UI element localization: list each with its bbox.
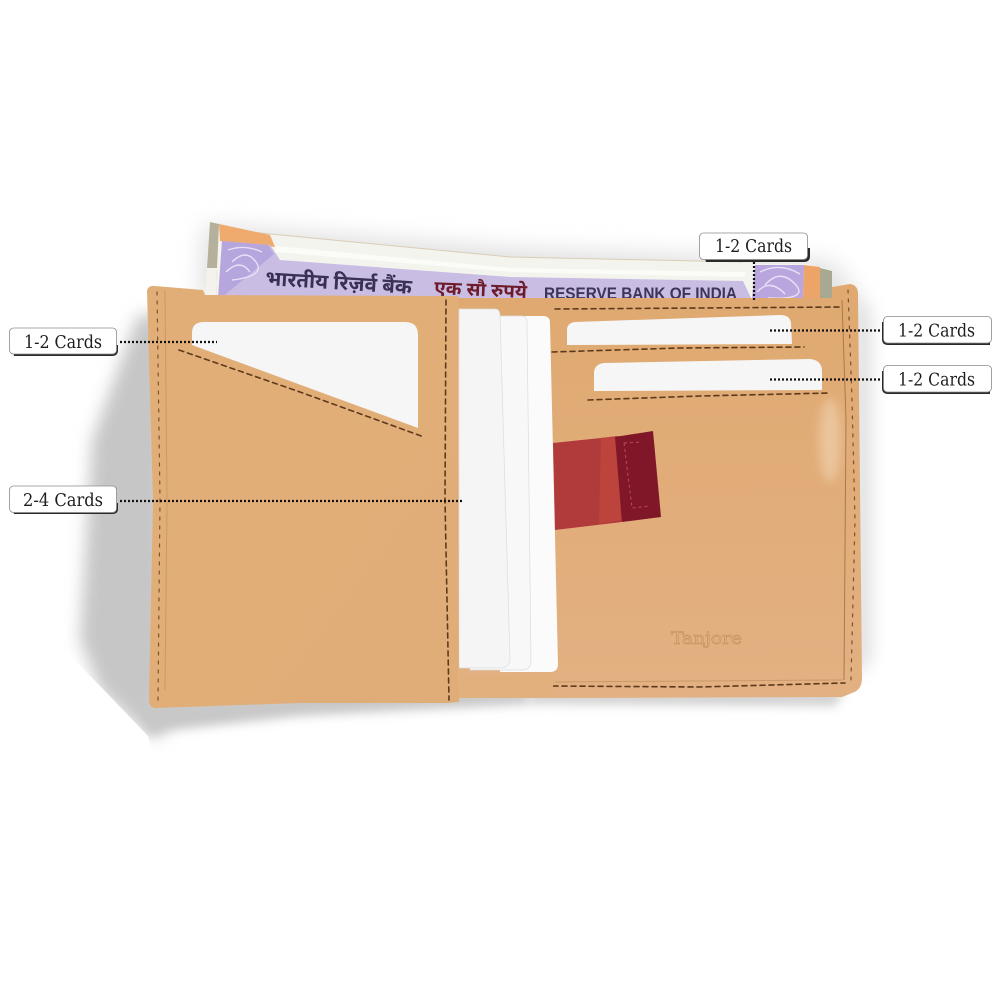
label: right lower 1-2 cards: 1-2 Cards [898, 370, 975, 390]
angled pocket card [192, 322, 418, 428]
note: grey left edge [204, 222, 219, 300]
center cards [459, 309, 558, 672]
leader line: second pocket [770, 378, 881, 381]
brand emboss: Tanjore [671, 629, 742, 649]
note: hindi value: एक सौ रुपये [434, 276, 528, 306]
strap middle shade [599, 436, 621, 524]
note: orange security pattern left [219, 224, 275, 247]
label: right top 1-2 cards: 1-2 Cards [898, 322, 975, 342]
pocket one stitching [552, 347, 804, 352]
label: right lower 1-2 cards [882, 366, 992, 394]
right edge stitching [848, 290, 855, 680]
note: grey right edge [820, 268, 832, 300]
highlight gloss [819, 398, 841, 482]
wallet right panel [458, 284, 862, 698]
left inner edge [165, 290, 167, 690]
right edge stitching [445, 300, 449, 700]
note: purple knot pattern left [218, 241, 274, 298]
wallet drop shadow [80, 226, 872, 736]
leather tip [615, 431, 661, 522]
note: purple knot pattern right [752, 265, 804, 300]
note: hindi bank name: भारतीय रिज़र्व बैंक [264, 266, 414, 303]
card in top pocket [567, 315, 792, 345]
label: right top 1-2 cards [882, 316, 992, 345]
card in second pocket [594, 359, 822, 391]
note: orange pattern right [803, 265, 820, 300]
strap tab [553, 431, 661, 530]
pocket two stitching [588, 393, 830, 400]
right panel leather [458, 284, 862, 698]
card 1 [459, 309, 510, 668]
card 3 [500, 316, 558, 672]
note: purple band [218, 241, 752, 300]
tip stitching [624, 442, 650, 508]
wallet left panel [147, 286, 459, 708]
inner fold edge [842, 300, 846, 680]
leader line: top pocket [770, 329, 881, 332]
bottom stitching [553, 683, 845, 687]
angled pocket stitching [179, 350, 424, 437]
suede strap [553, 436, 622, 530]
banknotes [204, 222, 832, 306]
note: english bank name: RESERVE BANK OF INDIA [544, 285, 737, 303]
left panel leather [147, 286, 459, 708]
hinge strip [459, 674, 553, 698]
leader line: top label [753, 262, 755, 300]
label: top 1-2 cards [700, 233, 810, 262]
top stitching [555, 307, 842, 309]
leader line: left pocket [120, 341, 217, 343]
upper card pockets [552, 315, 830, 400]
label: top 1-2 cards: 1-2 Cards [715, 237, 792, 257]
label: left 1-2 cards [10, 328, 118, 356]
left edge stitching [157, 292, 160, 700]
label: left 2-4 cards: 2-4 Cards [23, 491, 103, 511]
label: left 1-2 cards: 1-2 Cards [24, 333, 102, 353]
note: white paper body [204, 222, 832, 300]
card 2 [470, 316, 531, 670]
label: left 2-4 cards [10, 486, 118, 514]
leader line: center pocket [120, 500, 462, 502]
